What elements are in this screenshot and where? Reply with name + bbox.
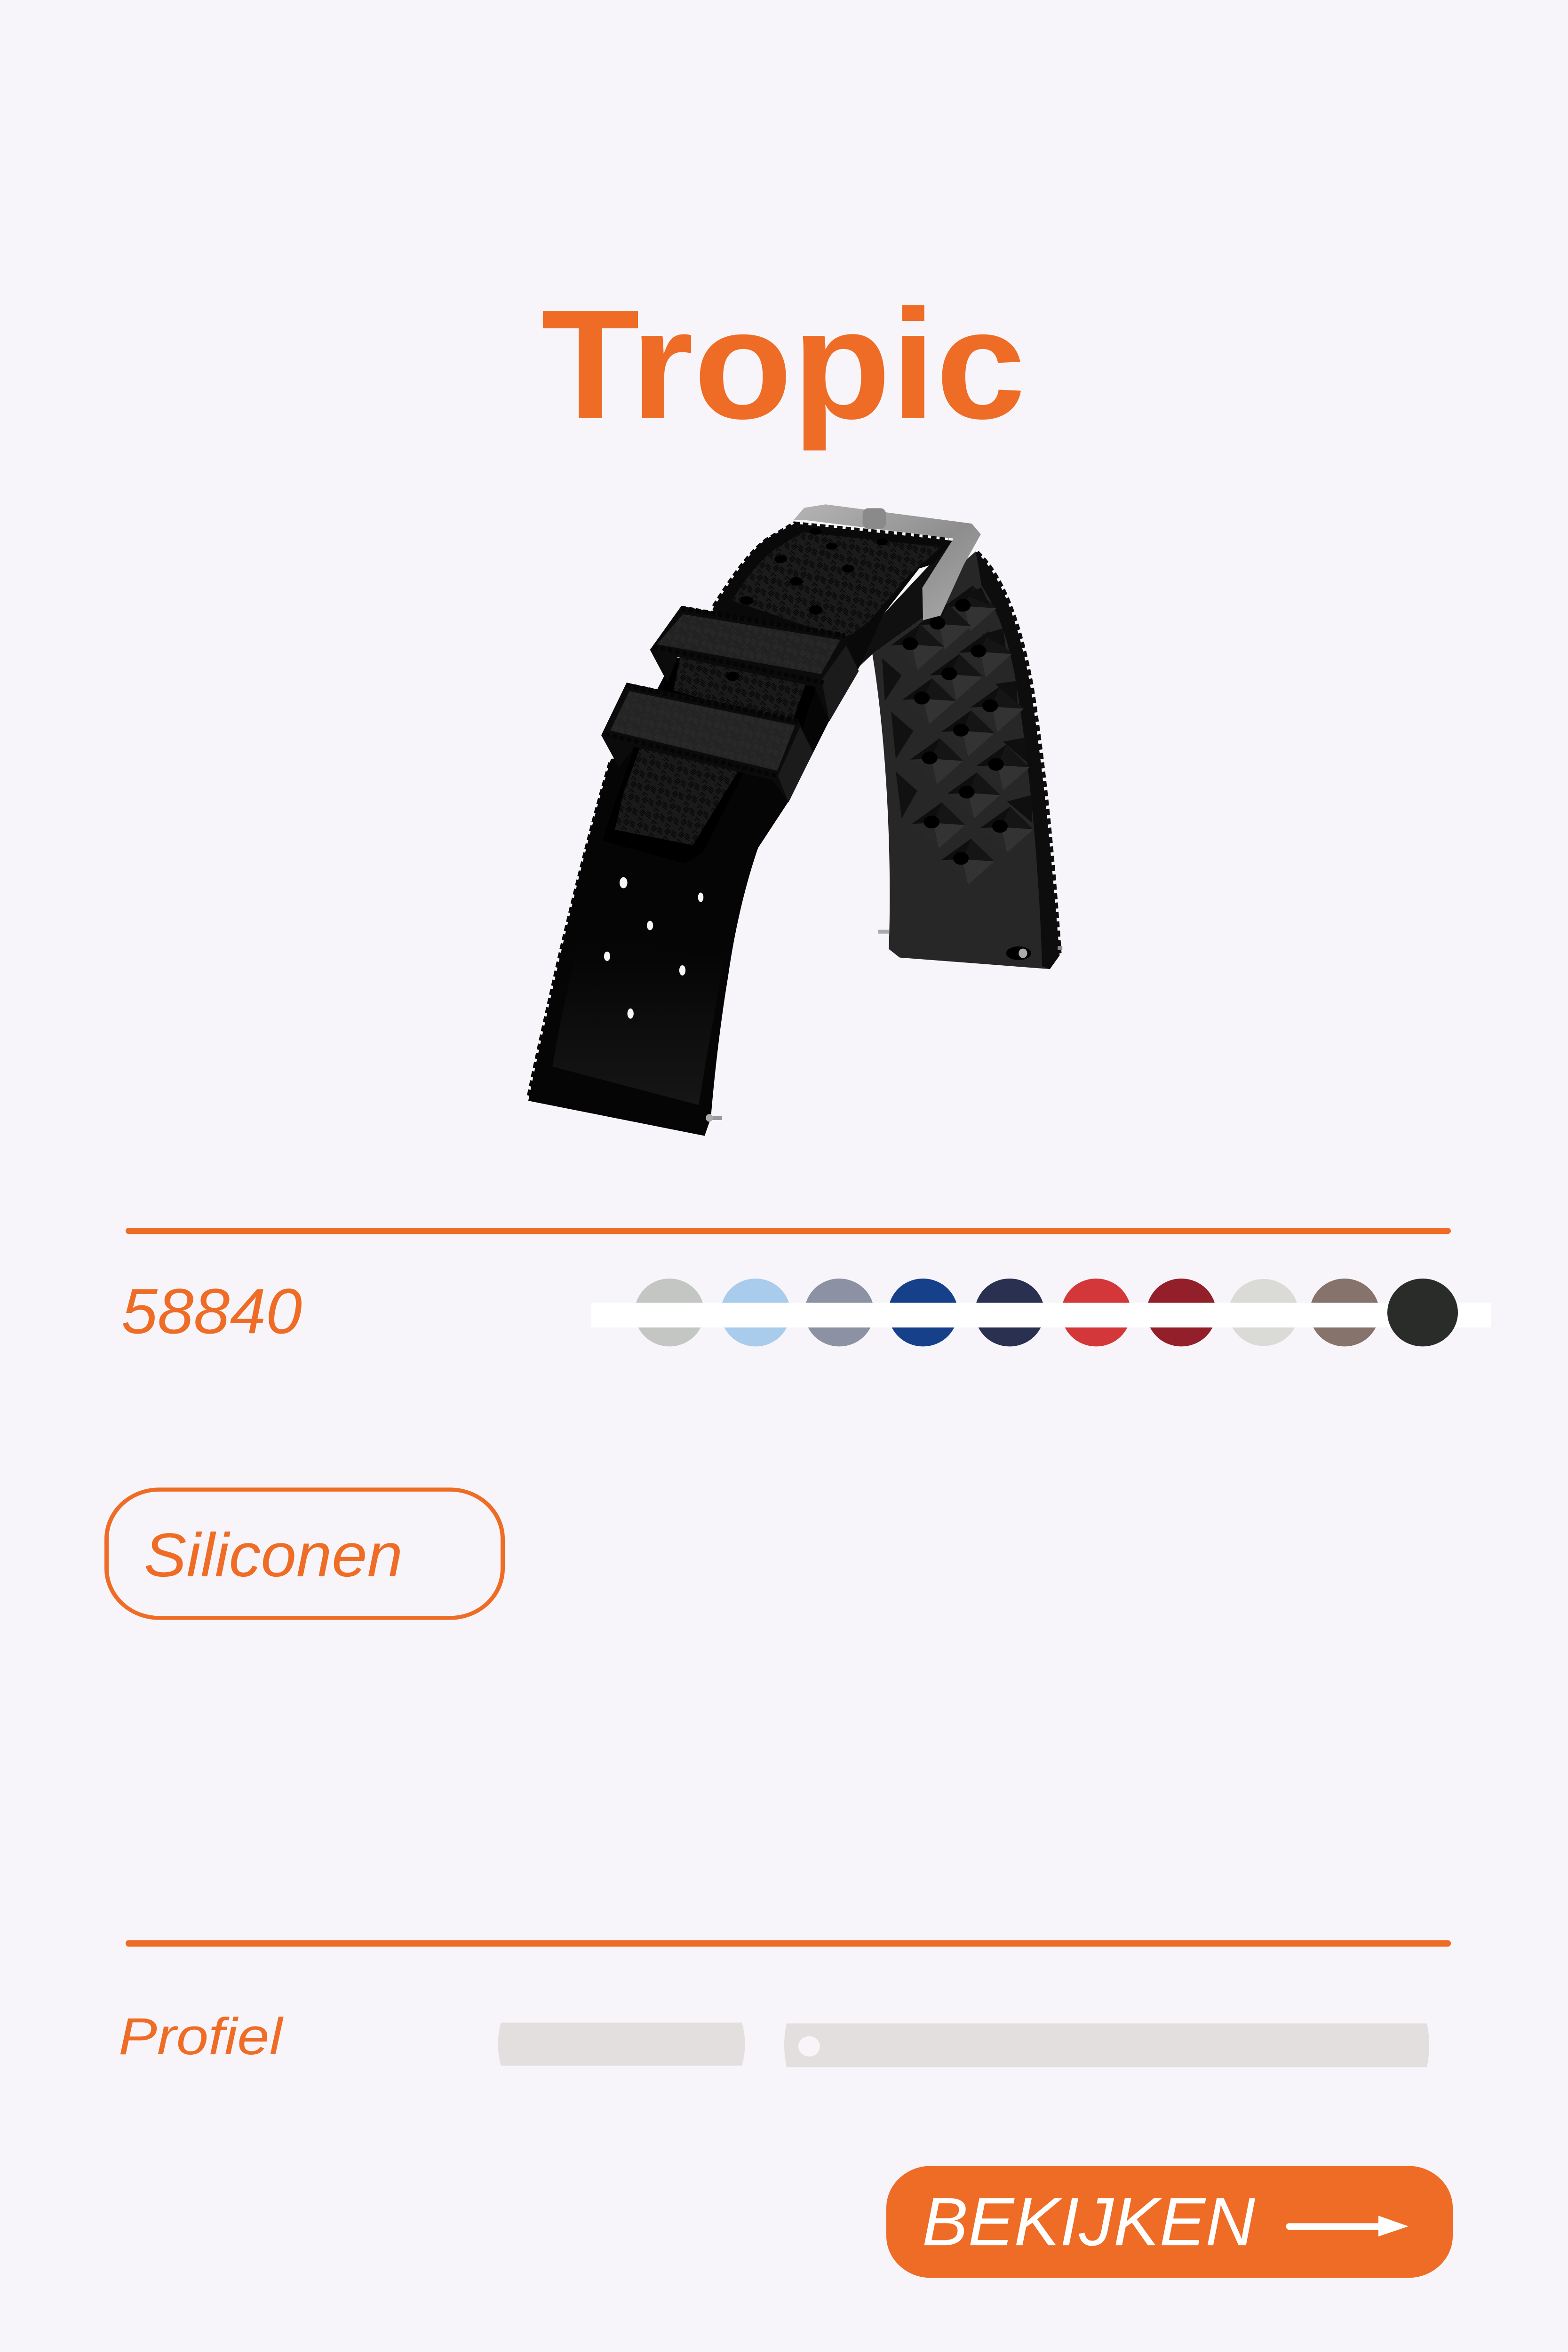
bottom divider	[126, 1940, 1451, 1947]
strap window between loops	[662, 656, 818, 729]
upper front strap	[712, 524, 952, 720]
keeper loop 2	[601, 683, 813, 803]
strap underlay behind loops	[603, 673, 829, 870]
keeper loop 1	[650, 606, 859, 721]
colour swatches	[591, 1279, 1491, 1346]
strap underside joining front and back	[857, 539, 954, 669]
button: bekijken: BEKIJKEN	[922, 2184, 1255, 2260]
profile bar large	[784, 2024, 1429, 2067]
textured strap tail	[603, 742, 748, 864]
arrow	[1286, 2216, 1409, 2236]
material tag	[106, 1490, 502, 1618]
profile bar small	[498, 2023, 745, 2066]
material tag: Siliconen	[144, 1520, 403, 1589]
title: Tropic	[541, 277, 1026, 452]
button: bekijken	[886, 2166, 1453, 2278]
product image: black tropic watch strap	[528, 504, 1062, 1136]
silver buckle	[794, 504, 981, 620]
back strap with diamond pattern	[872, 551, 1062, 969]
article number: 58840	[121, 1275, 302, 1347]
lower front strap	[528, 750, 780, 1136]
top divider	[126, 1228, 1451, 1234]
profile label: Profiel	[119, 2008, 284, 2066]
